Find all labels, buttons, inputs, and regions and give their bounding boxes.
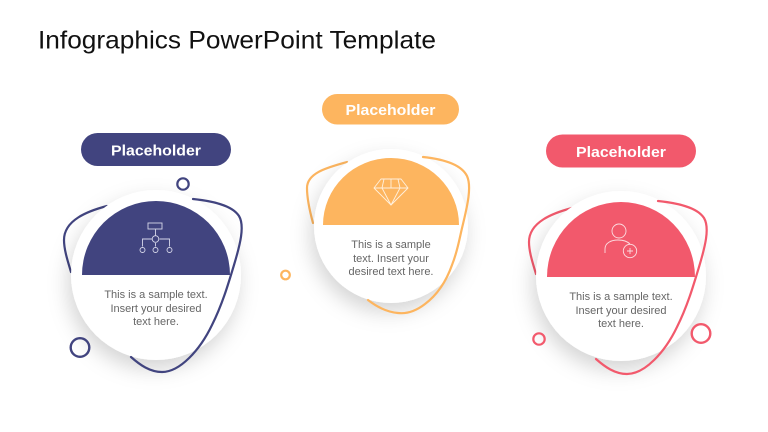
red small ring [533, 333, 545, 345]
red blob outline, front part [596, 201, 707, 374]
icon: hierarchy [140, 223, 172, 252]
orange pill heading: Placeholder [346, 102, 436, 119]
panel: blue placeholder [64, 133, 242, 372]
orange body text [348, 239, 434, 278]
icon: add user [605, 224, 637, 258]
orange body text: desired text here. [348, 266, 434, 278]
blue body text: Insert your desired [110, 303, 202, 315]
blue pill heading [81, 133, 231, 166]
orange blob outline, front part [368, 157, 469, 313]
blue body text [104, 289, 208, 328]
red blob outline, back part [529, 208, 572, 274]
blue pill heading: Placeholder [111, 142, 201, 160]
red semicircle [547, 202, 695, 277]
panel: red placeholder [529, 134, 710, 374]
red body text: Insert your desired [575, 305, 667, 317]
orange white circle [314, 149, 468, 303]
orange semicircle [323, 158, 459, 225]
red body text [569, 291, 673, 330]
orange small ring [281, 271, 290, 279]
blue semicircle [82, 201, 230, 275]
blue blob outline, front part [131, 199, 242, 372]
icon: diamond [374, 179, 408, 205]
panel: orange placeholder [281, 94, 469, 313]
red pill heading: Placeholder [576, 144, 666, 161]
blue large ring [71, 338, 89, 357]
blue white circle [71, 190, 241, 360]
orange body text: text. Insert your [353, 253, 429, 265]
red white circle [536, 191, 706, 361]
blue blob outline, back part [64, 206, 107, 272]
blue body text: text here. [133, 316, 179, 328]
orange pill heading [322, 94, 459, 124]
blue body text: This is a sample text. [104, 289, 208, 301]
orange blob outline, back part [307, 162, 347, 223]
red body text: text here. [598, 318, 644, 330]
orange body text: This is a sample [351, 239, 431, 251]
blue small ring [177, 178, 189, 190]
red body text: This is a sample text. [569, 291, 673, 303]
red pill heading [546, 134, 696, 168]
title: Infographics PowerPoint Template [38, 26, 436, 54]
red large ring [692, 324, 710, 343]
